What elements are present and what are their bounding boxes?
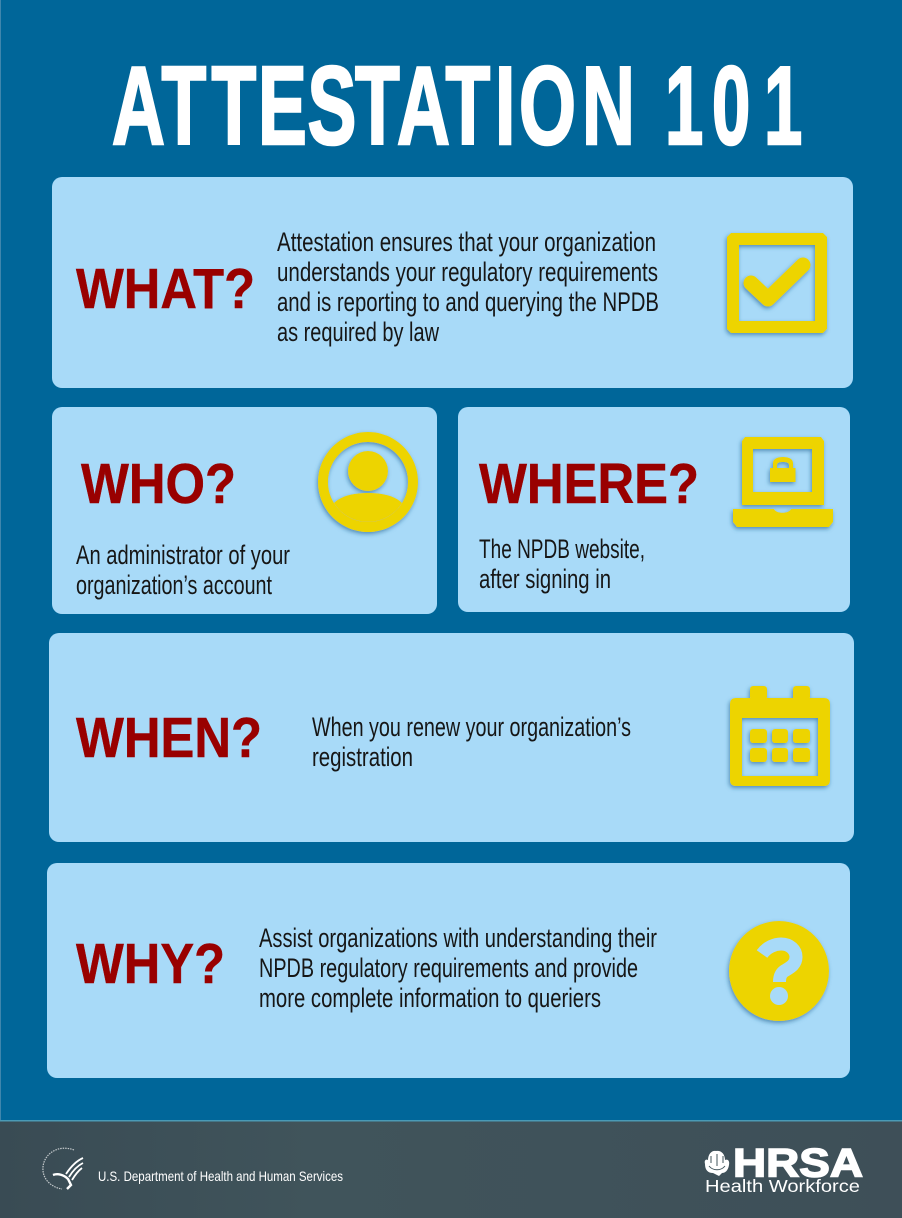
text: where description: The NPDB website,	[479, 534, 645, 564]
panel: what	[52, 177, 853, 388]
text: what description	[277, 227, 659, 347]
icon: laptop with lock	[733, 437, 833, 527]
heading: where: WHERE?	[479, 452, 699, 516]
panel: why	[47, 863, 850, 1078]
text: when description: When you renew your organization’s	[312, 712, 631, 742]
text: what description: understands your regulatory requirements	[277, 257, 658, 287]
text: where description: after signing in	[479, 564, 611, 594]
text: who description: An administrator of your	[76, 540, 290, 570]
title: ATTESTATION	[112, 44, 635, 168]
text: when description: registration	[312, 742, 413, 772]
text: why description: NPDB regulatory requirements and provide	[259, 953, 638, 983]
text: what description: and is reporting to and querying the NPDB	[277, 287, 659, 317]
footer bar	[0, 1120, 902, 1218]
heading: what: WHAT?	[76, 257, 255, 321]
panel: who	[52, 407, 437, 614]
text: what description: as required by law	[277, 317, 439, 347]
heading: when: WHEN?	[76, 706, 262, 770]
logo: HRSA: Health Workforce	[705, 1176, 860, 1196]
text: who description	[76, 540, 290, 600]
panel: when	[49, 633, 854, 842]
icon: question mark	[729, 921, 829, 1021]
text: when description	[312, 712, 631, 772]
text: who description: organization’s account	[76, 570, 272, 600]
icon: person	[318, 432, 418, 532]
icon: HHS eagle seal	[43, 1148, 83, 1189]
heading: why: WHY?	[76, 932, 225, 996]
title: 101	[665, 43, 802, 168]
text: where description	[479, 534, 645, 594]
heading: who: WHO?	[81, 452, 236, 516]
text: why description	[259, 923, 657, 1013]
text: what description: Attestation ensures that your organization	[277, 227, 656, 257]
text: why description: more complete information to queriers	[259, 983, 601, 1013]
icon: calendar	[730, 686, 830, 786]
icon: HRSA emblem	[705, 1151, 729, 1176]
icon: checkbox	[727, 233, 827, 333]
logo: HRSA: HRSA	[733, 1142, 863, 1186]
logo: HRSA	[705, 1142, 863, 1196]
panel: where	[458, 407, 850, 612]
text: HHS: U.S. Department of Health and Human Services	[98, 1168, 343, 1184]
text: why description: Assist organizations with understanding their	[259, 923, 657, 953]
